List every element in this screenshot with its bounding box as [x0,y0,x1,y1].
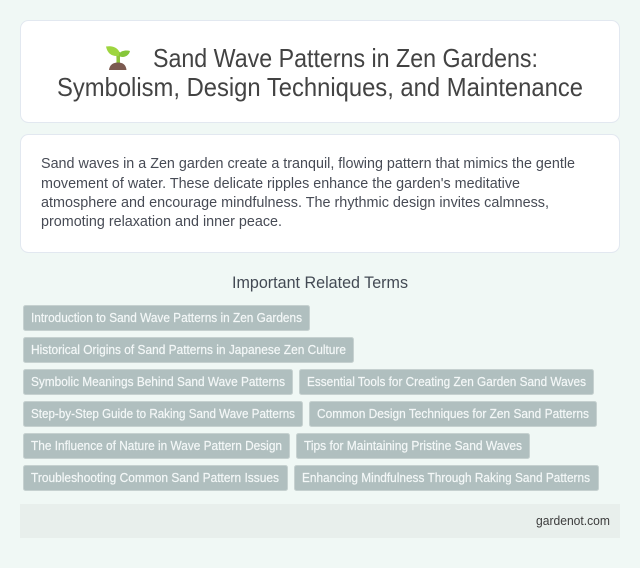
tag: maintenance tips: Tips for Maintaining Pristine Sand Waves [304,439,522,453]
footer site name: gardenot.com [536,513,610,528]
tag: essential tools: Essential Tools for Creating Zen Garden Sand Waves [307,375,586,389]
tag: design techniques: Common Design Techniques for Zen Sand Patterns [317,407,589,421]
tag: introduction: Introduction to Sand Wave Patterns in Zen Gardens [31,311,302,325]
panel: related term tags [24,306,598,490]
tag: mindfulness: Enhancing Mindfulness Through Raking Sand Patterns [302,471,590,485]
tag: symbolic meanings: Symbolic Meanings Behind Sand Wave Patterns [31,375,285,389]
description text: Sand waves in a Zen garden create a tranquil, flowing pattern that mimics the gentle [41,155,575,172]
panel: description [20,134,620,252]
tag: troubleshooting: Troubleshooting Common Sand Pattern Issues [31,471,279,485]
tag: historical origins: Historical Origins of Sand Patterns in Japanese Zen Culture [31,343,346,357]
title [57,43,583,102]
tag: symbolic meanings [24,370,292,394]
title: Sand Wave Patterns in Zen Gardens: [153,43,538,73]
footer [20,504,620,538]
tag: step-by-step guide: Step-by-Step Guide to Raking Sand Wave Patterns [31,407,295,421]
tag: historical origins [24,338,354,362]
tag: mindfulness [294,466,598,490]
tag: influence of nature: The Influence of Nature in Wave Pattern Design [31,439,282,453]
tag: introduction [24,306,310,330]
description text: atmosphere and encourage mindfulness. The rhythmic design invites calmness, [41,194,549,211]
tag: design techniques [310,402,596,426]
tag: essential tools [300,370,594,394]
description text: promoting relaxation and inner peace. [41,213,282,230]
tag: step-by-step guide [24,402,302,426]
icon: seedling [106,46,130,70]
description text [41,155,575,230]
tag: troubleshooting [24,466,288,490]
panel: title card [20,20,620,122]
title: Symbolism, Design Techniques, and Maintenance [57,72,583,102]
description text: movement of water. These delicate ripples enhance the garden's meditative [41,175,520,192]
heading: related terms: Important Related Terms [232,274,408,292]
tag: influence of nature [24,434,290,458]
tag: maintenance tips [296,434,530,458]
